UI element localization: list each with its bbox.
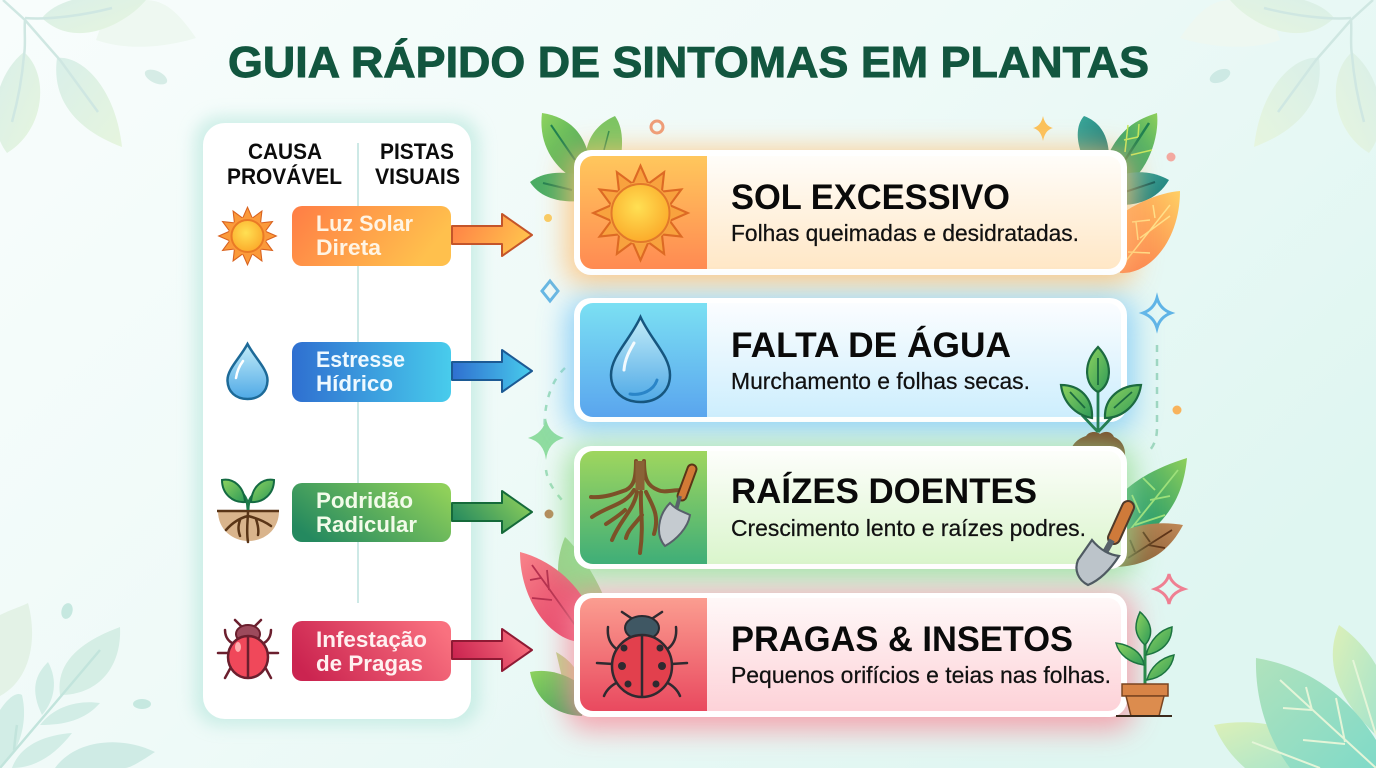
decoration: leaves beside lower cards: [520, 458, 1187, 716]
description: pragas e insetos: Pequenos orifícios e teias nas folhas.: [731, 662, 1111, 688]
pill: infestação de pragas: de Pragas: [316, 651, 423, 676]
panel: left column: [194, 116, 532, 726]
column heading: pistas visuais: [375, 139, 460, 189]
decoration: pale top-right leaves: [1180, 0, 1376, 153]
description: falta de água: Murchamento e folhas secas.: [731, 368, 1030, 394]
pill: podridão radicular: Podridão: [316, 488, 413, 513]
icon panel: roots and trowel: [580, 451, 707, 564]
icon panel: ladybug: [580, 598, 707, 711]
arrow: sol: [452, 214, 532, 256]
column heading: pistas visuais: VISUAIS: [375, 164, 460, 189]
pill: estresse hídrico: Estresse: [316, 347, 405, 372]
decoration: bottom-right leaves: [1214, 625, 1376, 768]
column heading: causa provável: CAUSA: [248, 139, 322, 164]
icon panel: water drop: [580, 303, 707, 417]
icon: small bug: [218, 620, 278, 678]
decoration: sparkles and dots: [528, 116, 1184, 604]
title: GUIA RÁPIDO DE SINTOMAS EM PLANTAS: [228, 37, 1149, 87]
arrow: raízes: [452, 491, 532, 533]
pill: estresse hídrico: [292, 342, 451, 402]
icon: small sprout with roots: [217, 480, 279, 542]
decoration: pale top-left leaves: [0, 0, 196, 153]
column heading: causa provável: PROVÁVEL: [227, 164, 342, 189]
icon: sprout with soil on card two: [1061, 347, 1141, 458]
column heading: causa provável: [227, 139, 342, 189]
icon: small sun: [219, 207, 276, 265]
arrow: água: [452, 350, 532, 392]
pill: podridão radicular: Radicular: [316, 512, 417, 537]
column heading: pistas visuais: PISTAS: [380, 139, 454, 164]
heading: falta de água: FALTA DE ÁGUA: [731, 325, 1011, 365]
icon: trowel: [1076, 507, 1128, 585]
description: raízes doentes: Crescimento lento e raízes podres.: [731, 515, 1086, 541]
card: raízes doentes: [566, 446, 1134, 579]
heading: pragas e insetos: PRAGAS & INSETOS: [731, 620, 1073, 659]
heading: raízes doentes: RAÍZES DOENTES: [731, 471, 1037, 511]
pill: infestação de pragas: [292, 621, 451, 681]
pill: luz solar direta: Luz Solar: [316, 211, 413, 236]
decoration: leaves behind first card: [530, 113, 1180, 273]
arrow: pragas: [452, 629, 532, 671]
card: falta de água: [566, 298, 1134, 432]
pill: luz solar direta: [292, 206, 451, 266]
pill: infestação de pragas: Infestação: [316, 627, 427, 652]
pill: luz solar direta: Direta: [316, 235, 382, 260]
icon: small water drop: [228, 344, 268, 399]
icon: potted plant: [1116, 612, 1174, 716]
card: pragas e insetos: [566, 593, 1134, 730]
card: sol excessivo: [566, 150, 1134, 285]
heading: sol excessivo: SOL EXCESSIVO: [731, 178, 1010, 217]
description: sol excessivo: Folhas queimadas e desidratadas.: [731, 220, 1079, 246]
pill: podridão radicular: [292, 483, 451, 542]
decoration: pale bottom-left leaves: [0, 602, 155, 768]
icon panel: sun: [580, 156, 707, 269]
pill: estresse hídrico: Hídrico: [316, 371, 393, 396]
